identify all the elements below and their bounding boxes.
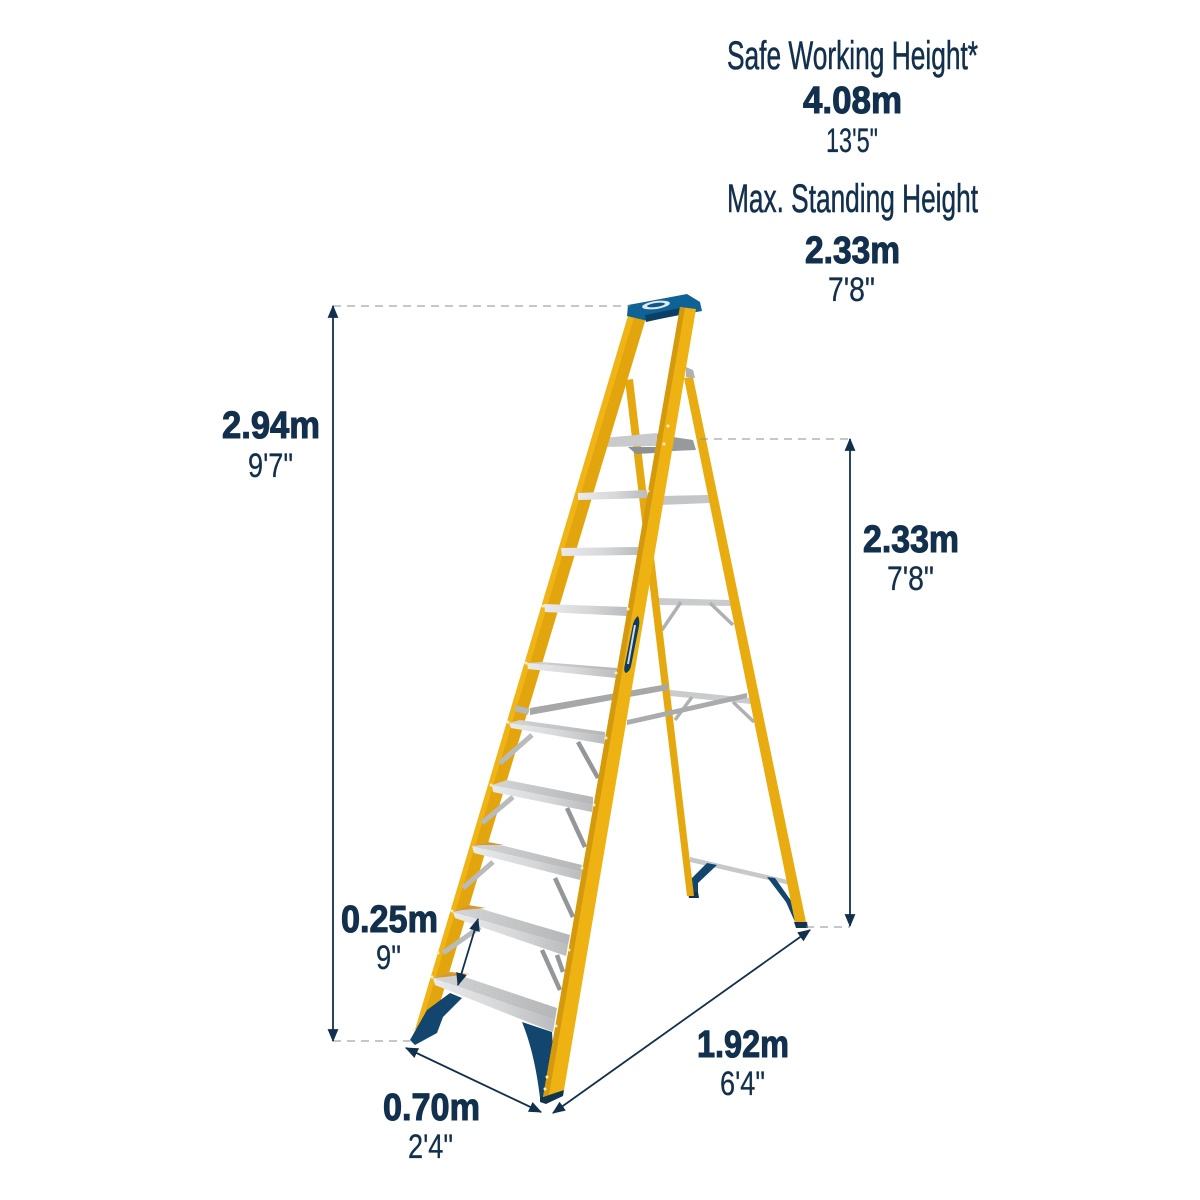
rear right rail — [684, 377, 806, 922]
label: depth: 1.92m — [697, 1024, 789, 1066]
heading: max standing height: Max. Standing Height — [727, 177, 978, 221]
label: depth: 6'4" — [720, 1065, 765, 1103]
label: standing height: 7'8" — [887, 560, 934, 598]
label: standing height — [863, 519, 959, 598]
rear hinge bracket — [686, 367, 695, 378]
rivets — [412, 424, 670, 1090]
tread 7 — [492, 780, 593, 812]
label: overall height — [222, 405, 320, 485]
front left rail — [412, 316, 646, 1040]
spreader bars — [514, 684, 747, 725]
height arrow — [332, 306, 334, 1041]
label: tread spacing: 0.25m — [341, 899, 438, 941]
tread 5 — [527, 662, 617, 678]
standing height arrow — [849, 439, 851, 926]
tread braces — [443, 735, 598, 990]
heading: safe working height: 4.08m — [803, 80, 902, 122]
label: width: 2'4" — [408, 1128, 453, 1166]
heading: max standing height: 2.33m — [805, 230, 900, 272]
label: depth — [697, 1024, 789, 1103]
heading: safe working height: 13'5" — [826, 122, 878, 160]
label: width — [383, 1087, 480, 1166]
front blue feet — [410, 993, 564, 1104]
depth arrow — [553, 930, 810, 1113]
dimension guide lines — [333, 306, 850, 1041]
top cap — [627, 294, 702, 322]
front right rail — [543, 307, 696, 1097]
tread 9 — [453, 905, 570, 956]
rear rungs — [658, 495, 790, 885]
front treads — [433, 490, 647, 1032]
label: standing height: 2.33m — [863, 519, 959, 561]
heading: max standing height — [727, 177, 978, 309]
label: tread spacing: 9" — [376, 939, 401, 977]
rear left rail — [625, 379, 694, 896]
heading: max standing height: 7'8" — [828, 271, 875, 309]
brand label on rail — [624, 616, 639, 673]
rear blue feet — [688, 863, 808, 928]
tread 10 — [433, 972, 557, 1032]
tread 6 — [509, 720, 605, 744]
tread 8 — [472, 842, 582, 880]
label: overall height: 9'7" — [248, 447, 293, 485]
label: tread spacing — [341, 899, 438, 977]
ladder — [410, 294, 808, 1104]
width arrow — [406, 1048, 541, 1112]
tread spacing arrow — [458, 919, 478, 985]
label: overall height: 2.94m — [222, 405, 320, 447]
heading: safe working height — [727, 34, 978, 160]
label: width: 0.70m — [383, 1087, 480, 1129]
rear legs — [625, 367, 808, 928]
platform — [603, 433, 696, 454]
heading: safe working height: Safe Working Height* — [727, 34, 978, 78]
